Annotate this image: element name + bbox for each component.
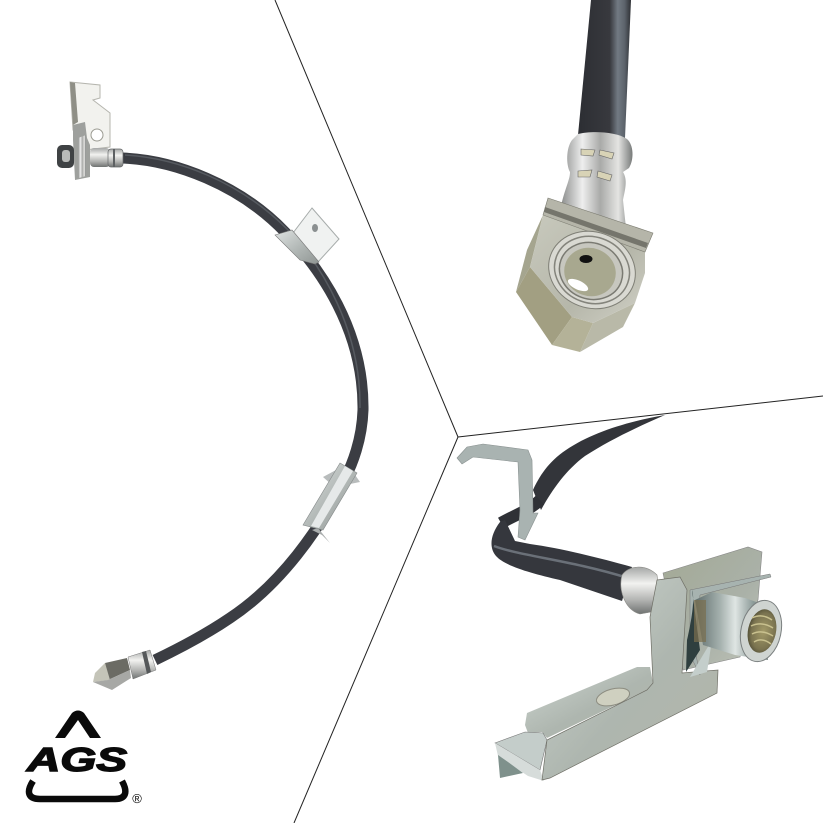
panel: full brake hose bbox=[57, 82, 363, 690]
hose bridge behind bracket bbox=[501, 500, 540, 523]
hook bracket bbox=[457, 444, 538, 540]
top mounting bracket bbox=[57, 82, 123, 180]
hose line bbox=[122, 155, 363, 660]
hex nut bbox=[516, 198, 653, 352]
logo: AGS bbox=[26, 710, 142, 806]
lower hose clip bbox=[303, 463, 360, 543]
hose front section bbox=[491, 520, 632, 601]
logo top chevron bbox=[55, 710, 101, 738]
logo bottom bracket bbox=[29, 781, 125, 799]
ferrule bbox=[621, 567, 662, 614]
hose end bbox=[578, 0, 631, 138]
panel: bracket close-up bbox=[457, 415, 787, 781]
panel: fitting close-up bbox=[516, 0, 653, 352]
threaded fitting bbox=[694, 592, 787, 665]
crimped ferrule bbox=[561, 132, 633, 228]
upper hose clip bbox=[275, 208, 339, 264]
logo wordmark: AGS bbox=[26, 741, 127, 778]
spring clip bbox=[686, 574, 771, 677]
vertical plate and skirt bbox=[542, 577, 718, 780]
bottom fitting bbox=[93, 650, 156, 690]
divider lines bbox=[275, 0, 823, 823]
hose back section bbox=[533, 415, 665, 510]
bottom tab bbox=[495, 667, 653, 781]
registered mark: ® bbox=[132, 791, 142, 806]
back plate bbox=[663, 547, 762, 670]
